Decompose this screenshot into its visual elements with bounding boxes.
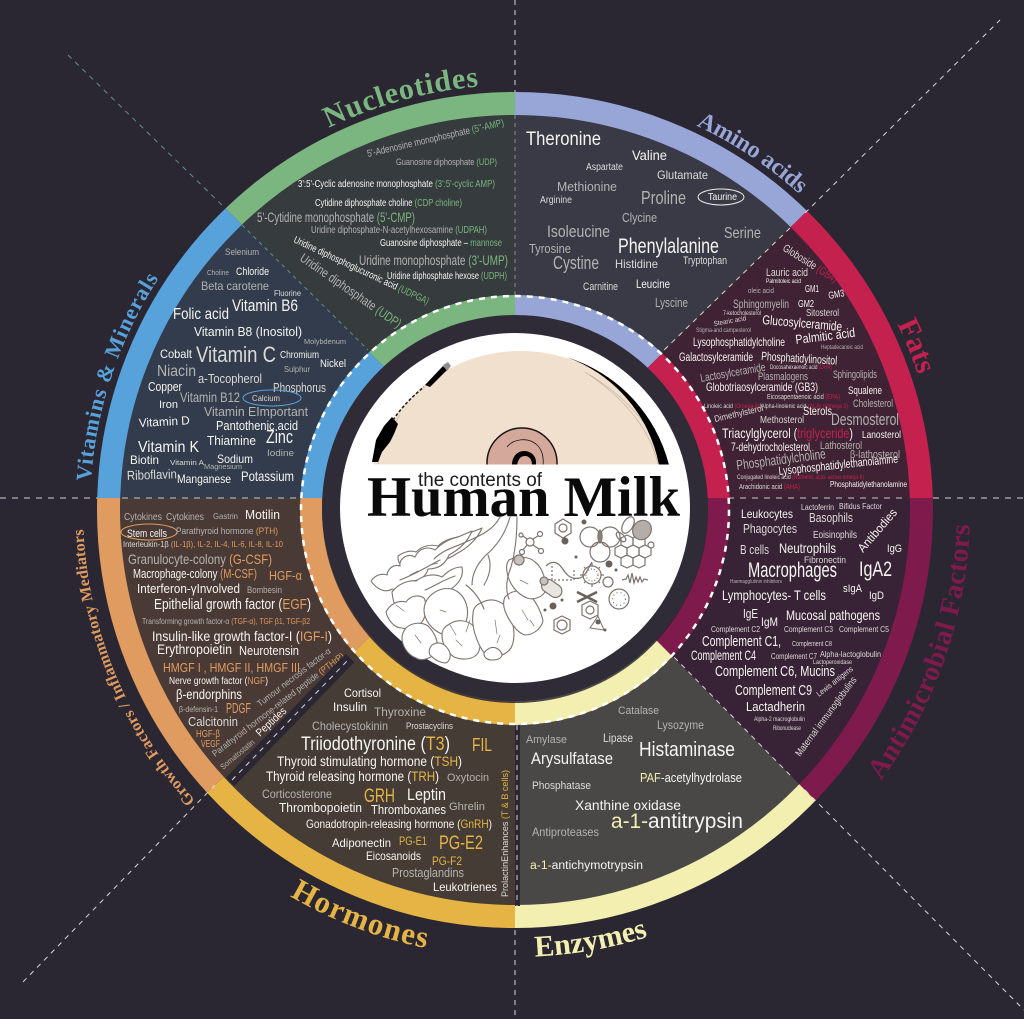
text: nucleotide compounds: Guanosine diphosphate (UDP) bbox=[396, 157, 497, 168]
text: enzyme names: a-1-antichymotrypsin bbox=[530, 860, 643, 872]
text: vitamin and mineral names: a-Tocopherol bbox=[198, 371, 262, 386]
text: amino acid names: Tyrosine bbox=[529, 241, 571, 256]
text: fat compounds: 7-ketocholesterol bbox=[723, 311, 761, 317]
text: vitamin and mineral names: Niacin bbox=[157, 363, 196, 380]
text: vitamin and mineral names: Vitamin B8 (Inositol) bbox=[194, 324, 302, 339]
text: hormone names: Thromboxanes bbox=[371, 802, 446, 817]
panel: vitamins and minerals bbox=[76, 208, 369, 498]
text: fat compounds: GM1 bbox=[805, 284, 819, 295]
text: growth factor names: Peptides bbox=[254, 705, 289, 739]
text: hormone names: Cortisol bbox=[344, 686, 381, 700]
text: growth factor names bbox=[121, 507, 346, 772]
text: growth factor names: Macrophage-colony (M-CSF) bbox=[133, 567, 257, 581]
text: hormone names: Leukotrienes bbox=[433, 880, 497, 894]
text: fat compounds: Palmitoleic acid bbox=[766, 279, 801, 285]
text: vitamin and mineral names: Beta carotene bbox=[201, 279, 269, 293]
text: fat compounds: Triacylglycerol (triglyceride) bbox=[722, 425, 853, 441]
text: vitamin and mineral names: Choline bbox=[207, 270, 229, 277]
text: hormone names: Thyroid releasing hormone (TRH) bbox=[266, 768, 439, 784]
text: hormone names: ProlactinEnhances (T & B cells) bbox=[500, 770, 511, 897]
text: growth factor names: Cytokines bbox=[166, 512, 204, 523]
text: growth factor names: Epithelial growth factor (EGF) bbox=[154, 596, 311, 613]
text: enzyme names bbox=[526, 705, 743, 872]
text: antimicrobial compounds: Complement C2 bbox=[711, 625, 760, 634]
text: amino acid names: Cystine bbox=[553, 253, 599, 273]
text: fat compounds: Phosphatidylcholine bbox=[735, 445, 827, 473]
text: nucleotide compounds: 5'-Adenosine monophosphate (5''-AMP) bbox=[366, 118, 505, 160]
text: antimicrobial compounds: Bifidus Factor bbox=[839, 502, 882, 511]
text: antimicrobial compounds: Maternal immunoglobulins bbox=[794, 675, 860, 759]
text: amino acid names: Leucine bbox=[636, 277, 670, 291]
text: antimicrobial compounds: Basophils bbox=[809, 510, 853, 525]
text: antimicrobial compounds: IgM bbox=[761, 615, 778, 629]
text: hormone names: Adiponectin bbox=[332, 836, 391, 850]
text: vitamin and mineral names: Pantothenic acid bbox=[216, 418, 298, 433]
panel: amino acids bbox=[515, 92, 807, 353]
text: vitamin and mineral names: Vitamin EImportant bbox=[204, 404, 308, 419]
text: vitamin and mineral names: Biotin bbox=[130, 453, 159, 467]
heading: vitamins and minerals: Vitamins & Minerals bbox=[76, 274, 158, 480]
text: growth factor names: Interferon-γInvolved bbox=[137, 581, 240, 596]
text: hormone names: PG-F2 bbox=[432, 854, 462, 868]
text: antimicrobial compounds: Complement C7 bbox=[771, 652, 817, 661]
heading: enzymes: Enzymes bbox=[534, 924, 646, 958]
text: fat compounds: GM2 bbox=[798, 299, 814, 310]
text: vitamin and mineral names: Sodium bbox=[217, 452, 253, 466]
text: antimicrobial compounds: IgD bbox=[869, 590, 884, 602]
text: fat compounds: Plasmalogens bbox=[758, 371, 808, 383]
text: antimicrobial compounds: Lewis antigens bbox=[815, 664, 855, 699]
callout: calcium bbox=[243, 390, 301, 406]
text: enzyme names: Arysulfatase bbox=[531, 749, 613, 768]
text: fat compounds: Galactosylceramide bbox=[679, 352, 753, 364]
text: amino acid names: Lyscine bbox=[655, 295, 688, 310]
title: the contents of bbox=[418, 470, 543, 491]
text: antimicrobial compounds: Fibronectin bbox=[804, 555, 846, 566]
heading: antimicrobial factors: Antimicrobial Factors bbox=[870, 525, 970, 780]
text: hormone names: Cholecystokinin bbox=[312, 719, 388, 733]
text: nucleotide compounds: Guanosine diphosphate – mannose bbox=[380, 238, 502, 249]
text: fat compounds: Cholesterol bbox=[853, 398, 893, 410]
heading: nucleotides: Nucleotides bbox=[321, 69, 478, 128]
text: enzyme names: Lipase bbox=[603, 733, 633, 745]
text: hormone names: Prostacyclins bbox=[406, 721, 453, 732]
heading: fats: Fats bbox=[898, 316, 930, 374]
text: fat compounds: Glucosylceramide bbox=[762, 312, 843, 334]
text: fat compounds: Eicosapentaenoic acid (EPA) bbox=[767, 394, 840, 401]
text: nucleotide compounds: Uridine diphosphoglucuronic acid (UDPGA) bbox=[292, 235, 431, 307]
text: antimicrobial compounds: Mucosal pathogens bbox=[786, 607, 880, 623]
text: antimicrobial compounds: Complement C5 bbox=[839, 625, 889, 634]
inner coloured ring bbox=[301, 296, 729, 724]
text: growth factor names: Motilin bbox=[245, 507, 280, 522]
text: antimicrobial compounds: Lymphocytes- T cells bbox=[722, 587, 826, 603]
text: fat compounds: Phosphatidylinositol bbox=[761, 349, 838, 368]
text: fat compounds: Globoside (GB4) bbox=[780, 242, 839, 285]
text: antimicrobial compounds: sIgA bbox=[843, 583, 863, 595]
illustration: milk ducts and lobes bbox=[371, 517, 546, 663]
title: Human Milk bbox=[367, 466, 680, 529]
text: fat compounds: Heptadecanoic acid bbox=[821, 345, 863, 351]
text: antimicrobial compounds: Antibodies bbox=[855, 506, 900, 555]
illustration: breast bbox=[372, 351, 669, 464]
callout: taurine bbox=[698, 189, 744, 205]
text: antimicrobial compounds: Complement C9 bbox=[735, 682, 812, 699]
text: hormone names: Triiodothyronine (T3) bbox=[301, 734, 450, 755]
panel: nucleotides bbox=[226, 69, 515, 352]
text: fat compounds: Conjugated linoleic acid (Rumenic acid- active omega 6) bbox=[737, 475, 864, 481]
text: antimicrobial compounds: Complement C3 bbox=[784, 625, 833, 634]
text: vitamin and mineral names: Vitamin D bbox=[138, 413, 190, 430]
text: nucleotide compounds: 5'-Cytidine monophosphate (5'-CMP) bbox=[257, 209, 415, 225]
text: fat compounds: Phosphatidylethanolamine bbox=[830, 480, 907, 489]
text: nucleotide compounds: Cytidine diphosphate choline (CDP choline) bbox=[315, 198, 462, 209]
text: enzyme names: PAF-acetylhydrolase bbox=[640, 770, 742, 785]
text: fat compounds: 7-dehydrocholesterol bbox=[731, 440, 810, 454]
text: antimicrobial compounds: Alpha-lactoglobulin bbox=[820, 649, 881, 659]
text: vitamin and mineral names: Nickel bbox=[320, 358, 346, 370]
text: growth factor names: Erythropoietin bbox=[157, 642, 232, 657]
text: amino acid names: Clycine bbox=[622, 210, 657, 225]
text: antimicrobial compounds: Eoisinophils bbox=[813, 530, 857, 541]
text: antimicrobial compounds: Lactoperoxidase bbox=[813, 659, 852, 666]
text: antimicrobial compounds: Complement C4 bbox=[691, 647, 756, 663]
panel: enzymes bbox=[515, 640, 816, 958]
text: hormone names: Thrombopoietin bbox=[279, 800, 362, 815]
text: vitamin and mineral names: Potassium bbox=[241, 468, 294, 484]
text: enzyme names: Phosphatase bbox=[532, 780, 591, 792]
text: amino acid names: Carnitine bbox=[583, 281, 618, 293]
text: amino acid names: Isoleucine bbox=[547, 222, 610, 241]
text: enzyme names: a-1-antitrypsin bbox=[611, 810, 743, 833]
text: growth factor names: HMGF I , HMGF II, HMGF III bbox=[163, 660, 300, 675]
text: fat compounds: Sterols bbox=[803, 404, 832, 418]
text: fat compounds: β-lathosterol bbox=[850, 449, 900, 461]
text: amino acid names: Methionine bbox=[557, 179, 617, 194]
text: fat compounds: Sphingomyelin bbox=[733, 297, 789, 311]
text: enzyme names: Lysozyme bbox=[657, 720, 704, 732]
text: vitamin and mineral names: Vitamin B6 bbox=[232, 296, 298, 315]
text: vitamin and mineral names: Riboflavin bbox=[127, 466, 177, 483]
text: amino acid names: Serine bbox=[724, 225, 761, 242]
text: fat compounds: Linoleic acid (Omega 6)/Alpha-linolenic acid (ALA) (Omega 3) bbox=[704, 403, 848, 410]
panel: fats bbox=[662, 211, 933, 498]
text: hormone names: Ghrelin bbox=[449, 801, 485, 813]
text: antimicrobial compounds: Haemagglutinin inhibitors bbox=[730, 579, 782, 585]
text: vitamin and mineral names: Manganese bbox=[177, 472, 231, 486]
text: growth factor names: Bombesin bbox=[247, 585, 282, 595]
text: hormone names: Thyroid stimulating hormone (TSH) bbox=[277, 753, 462, 769]
text: fat compounds: Docosahexaenoic acid (DHA) bbox=[770, 365, 832, 371]
text: hormone names: Prostaglandins bbox=[392, 865, 464, 880]
text: growth factor names: Calcitonin bbox=[188, 714, 238, 729]
text: nucleotide compounds: Uridine diphosphate hexose (UDPH) bbox=[387, 271, 507, 282]
text: antimicrobial compounds: Ribonuclease bbox=[773, 726, 802, 732]
text: vitamin and mineral names: Folic acid bbox=[173, 306, 229, 323]
text: amino acid names: Theronine bbox=[526, 129, 601, 150]
illustration: molecules and cells bbox=[514, 515, 655, 634]
text: growth factor names: VEGF bbox=[201, 739, 220, 750]
text: antimicrobial compounds: Complement C1, bbox=[702, 633, 781, 650]
text: hormone names: Thyroxine bbox=[374, 707, 426, 719]
text: vitamin and mineral names: Selenium bbox=[225, 247, 259, 257]
text: growth factor names: Parathyroid hormone (PTH) bbox=[176, 526, 278, 537]
text: antimicrobial compounds: Lactoferrin bbox=[801, 503, 834, 512]
text: antimicrobial compounds: Complement C6, Mucins bbox=[715, 663, 835, 680]
text: antimicrobial compounds: Leukocytes bbox=[741, 507, 793, 521]
text: vitamin and mineral names: Thiamine bbox=[207, 433, 256, 448]
text: fat compounds: Squalene bbox=[848, 385, 882, 397]
text: fat compounds: oleic acid bbox=[748, 288, 774, 295]
text: enzyme names: Histaminase bbox=[639, 739, 735, 761]
text: vitamin and mineral names: Chromium bbox=[280, 349, 319, 361]
text: fat compounds: Lathosterol bbox=[820, 440, 862, 452]
text: antimicrobial compounds: IgA2 bbox=[859, 558, 892, 581]
text: hormone names: PG-E2 bbox=[439, 833, 483, 854]
text: growth factor names: PDGF bbox=[226, 700, 251, 717]
text: antimicrobial compounds: Neutrophils bbox=[779, 540, 836, 556]
text: antimicrobial compounds: Lactadherin bbox=[746, 699, 805, 714]
text: hormone names: GRH bbox=[364, 786, 395, 807]
panel: antimicrobial factors bbox=[656, 498, 970, 800]
callout: stem cells: Stem cells bbox=[127, 528, 167, 540]
text: hormone names: Corticosterone bbox=[262, 787, 332, 801]
text: vitamin and mineral names: Vitamin B12 bbox=[180, 389, 240, 405]
text: growth factor names: Insulin-like growth factor-I (IGF-I) bbox=[152, 628, 332, 644]
callout: calcium: Calcium bbox=[252, 393, 280, 403]
text: fat compounds: Stearic acid bbox=[713, 315, 747, 328]
text: vitamin and mineral names: Sulphur bbox=[284, 364, 310, 374]
text: vitamin and mineral names: Molybdenum bbox=[304, 337, 346, 346]
text: fat compounds: Lysophosphatidylethanolamine bbox=[778, 451, 899, 478]
panel: growth factors and inflammatory mediators bbox=[76, 498, 370, 805]
text: fat compounds: Palmitic acid bbox=[795, 325, 856, 347]
text: growth factor names: HGF-α bbox=[269, 568, 302, 583]
text: vitamin and mineral names: Cobalt bbox=[160, 347, 193, 361]
text: growth factor names: Tumour necrosis factor-α bbox=[255, 646, 333, 709]
text: amino acid names bbox=[526, 129, 761, 310]
text: nucleotide compounds bbox=[257, 118, 508, 331]
text: vitamin and mineral names: Phosphorus bbox=[273, 380, 326, 395]
text: antimicrobial compounds: Phagocytes bbox=[743, 521, 797, 536]
text: enzyme names: Catalase bbox=[618, 705, 659, 717]
text: growth factor names: β-endorphins bbox=[176, 686, 242, 702]
text: vitamin and mineral names: Magnesium bbox=[204, 462, 242, 471]
text: amino acid names: Tryptophan bbox=[683, 255, 727, 267]
text: fat compounds: Stigma-and campesterol bbox=[696, 328, 751, 334]
text: hormone names: PG-E1 bbox=[399, 834, 427, 848]
text: vitamin and mineral names: Zinc bbox=[266, 427, 293, 447]
text: growth factor names: Neurotensin bbox=[239, 643, 299, 658]
text: enzyme names: Antiproteases bbox=[532, 825, 599, 839]
text: amino acid names: Proline bbox=[641, 188, 686, 208]
text: amino acid names: Histidine bbox=[615, 257, 658, 271]
text: nucleotide compounds: Uridine diphosphate-N-acetylhexosamine (UDPAH) bbox=[311, 225, 487, 236]
text: antimicrobial compounds: B cells bbox=[740, 542, 769, 557]
text: antimicrobial compounds bbox=[691, 502, 902, 759]
text: vitamin and mineral names: Copper bbox=[148, 379, 183, 394]
text: amino acid names: Valine bbox=[632, 147, 667, 163]
text: nucleotide compounds: Uridine monophosphate (3'-UMP) bbox=[359, 252, 508, 268]
text: vitamin and mineral names: Iodine bbox=[267, 448, 294, 459]
text: fat compounds: Methosterol bbox=[760, 414, 804, 426]
text: growth factor names: Gastrin bbox=[213, 511, 238, 521]
text: growth factor names: Cytokines bbox=[124, 512, 162, 523]
text: fat compounds: Lauric acid bbox=[766, 267, 808, 279]
text: nucleotide compounds: Uridine diphosphate (UDP) bbox=[297, 250, 404, 331]
heading: growth factors: Growth Factors / Inflammatory Mediators bbox=[76, 530, 193, 805]
text: vitamin and mineral names: Vitamin C bbox=[196, 342, 276, 367]
text: fat compounds: Sitosterol bbox=[806, 308, 839, 319]
text: antimicrobial compounds: Macrophages bbox=[748, 559, 837, 582]
text: nucleotide compounds: 3':5'-Cyclic adenosine monophosphate (3':5'-cyclic AMP) bbox=[298, 179, 495, 190]
heading: amino acids: Amino acids bbox=[696, 114, 806, 192]
text: antimicrobial compounds: IgE bbox=[743, 606, 758, 621]
text: hormone names: Eicosanoids bbox=[366, 849, 421, 863]
text: fat compounds: Lanosterol bbox=[862, 429, 901, 441]
text: fat compounds: Dimethylsterol bbox=[713, 403, 764, 424]
text: vitamin and mineral names: Vitamin K bbox=[138, 439, 199, 456]
text: amino acid names: Phenylalanine bbox=[618, 235, 719, 258]
text: hormone names: Oxytocin bbox=[447, 772, 489, 784]
text: hormone names: Insulin bbox=[333, 702, 367, 714]
text: fat compounds: Lysophosphatidylcholine bbox=[693, 335, 785, 349]
text: growth factor names: Transforming growth factor-α (TGF-α), TGF β1, TGF-β2 bbox=[142, 617, 310, 626]
text: hormone names: FIL bbox=[472, 735, 492, 755]
text: fat compounds: Desmosterol bbox=[831, 410, 899, 429]
text: hormone names: Gonadotropin-releasing hormone (GnRH) bbox=[306, 817, 492, 831]
text: amino acid names: Glutamate bbox=[657, 168, 708, 182]
text: growth factor names: Granulocyte-colony (G-CSF) bbox=[128, 551, 272, 567]
text: fat compounds: Sphingolipids bbox=[833, 369, 877, 381]
text: hormone names bbox=[262, 686, 511, 897]
text: vitamin and mineral names bbox=[127, 247, 346, 486]
callout: stem cells bbox=[121, 524, 177, 540]
text: growth factor names: Nerve growth factor (NGF) bbox=[169, 675, 268, 687]
heading: hormones: Hormones bbox=[290, 878, 428, 948]
text: enzyme names: Amylase bbox=[526, 734, 567, 746]
text: fat compounds: Globotriaosylceramide (GB3) bbox=[706, 380, 818, 394]
callout: taurine: Taurine bbox=[708, 192, 737, 203]
text: fat compounds bbox=[679, 242, 907, 491]
text: amino acid names: Arginine bbox=[540, 195, 572, 206]
text: fat compounds: Arachidonic acid (AHA) bbox=[739, 482, 800, 491]
text: growth factor names: Parathyroid hormone-related peptide (PTHrP) bbox=[210, 651, 346, 759]
text: antimicrobial compounds: Complement C8 bbox=[792, 641, 832, 648]
text: amino acid names: Aspartate bbox=[586, 162, 623, 173]
text: growth factor names: β-defensin-1 bbox=[179, 705, 218, 714]
text: hormone names: Leptin bbox=[407, 785, 446, 804]
centre disc bbox=[322, 315, 708, 701]
text: fat compounds: GM3 bbox=[828, 288, 846, 302]
text: vitamin and mineral names: Fluorine bbox=[274, 289, 302, 298]
text: vitamin and mineral names: Vitamin A bbox=[170, 458, 204, 467]
text: growth factor names: Interleukin-1β (IL-1β), IL-2, IL-4, IL-6, IL-8, IL-10 bbox=[123, 540, 284, 549]
text: growth factor names: HGF-β bbox=[196, 729, 220, 740]
text: antimicrobial compounds: IgG bbox=[887, 543, 902, 555]
text: antimicrobial compounds: Alpha-2 macroglobulin bbox=[754, 717, 805, 723]
divider gaps between panels bbox=[230, 658, 518, 906]
text: growth factor names: Somatostatin bbox=[219, 738, 256, 772]
text: vitamin and mineral names: Iron bbox=[159, 399, 178, 411]
panel: hormones bbox=[208, 636, 515, 948]
text: vitamin and mineral names: Chloride bbox=[236, 266, 269, 278]
text: fat compounds: Lactosylceramide bbox=[699, 362, 767, 385]
text: enzyme names: Xanthine oxidase bbox=[575, 797, 681, 813]
